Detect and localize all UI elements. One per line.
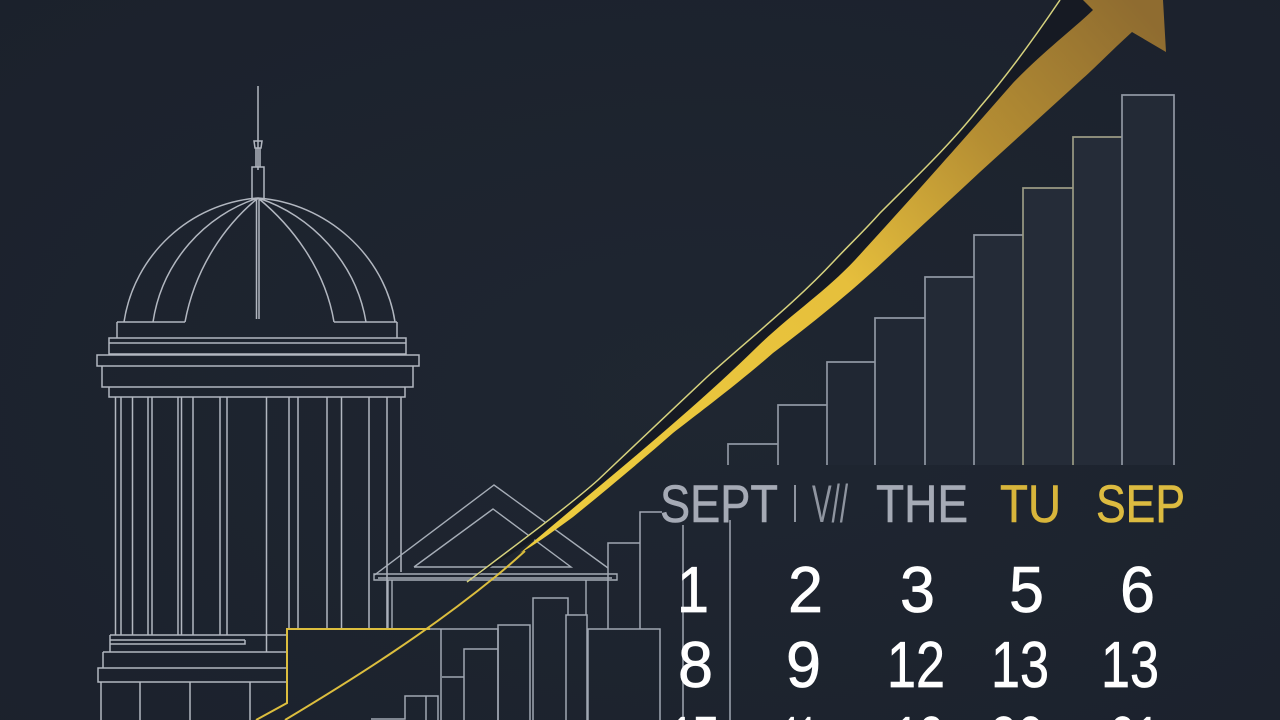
arrow: thin line upper — [467, 0, 1060, 582]
icon: domed capitol building — [97, 86, 419, 720]
bar 5 outline — [925, 277, 974, 465]
calendar header row — [660, 475, 1185, 534]
header: SEP: SEP — [1096, 475, 1185, 534]
bar 3 outline — [827, 362, 875, 465]
header: I — [794, 485, 796, 522]
row 1: 5 — [1009, 553, 1044, 626]
bar 4 outline — [875, 318, 925, 465]
shadow band beside arrow — [467, 0, 1093, 582]
bar 6 — [974, 235, 1023, 465]
bar 1 — [728, 444, 778, 465]
header: TU: TU — [1000, 475, 1061, 534]
bar 4 — [875, 318, 925, 465]
bar 2 — [778, 405, 827, 465]
row 1: 6 — [1120, 553, 1155, 626]
bar 9 outline — [1122, 95, 1174, 465]
bar 7 outline — [1023, 188, 1073, 465]
bar 6 outline — [974, 235, 1023, 465]
row 2: 9 — [786, 628, 821, 701]
row 2: 8 — [678, 628, 713, 701]
row 1 — [677, 553, 1155, 626]
header: THE: THE — [876, 475, 968, 534]
row 2: 13 — [1101, 628, 1159, 701]
entablature — [374, 574, 617, 580]
arrow: thin gold outline tail — [256, 551, 525, 720]
row 1: 1 — [677, 553, 709, 626]
calendar numbers — [677, 553, 1159, 701]
small city bar chart — [371, 512, 730, 720]
pediment roofs — [374, 485, 608, 575]
bar 2 outline — [778, 405, 827, 465]
header: SEPT: SEPT — [660, 475, 778, 534]
bar 3 — [827, 362, 875, 465]
bar 5 — [925, 277, 974, 465]
row 2 — [678, 628, 1159, 701]
icon: small pediment building — [374, 485, 617, 629]
bar 8 — [1073, 137, 1122, 465]
row 2: 13 — [991, 628, 1049, 701]
building base steps — [98, 635, 287, 720]
bar 7 — [1023, 188, 1073, 465]
row 1: 2 — [788, 553, 823, 626]
colonnade — [116, 397, 401, 652]
arrow: gold growth arrow — [520, 0, 1166, 553]
dome ribs — [124, 198, 395, 322]
row 1: 3 — [900, 553, 935, 626]
bar 9 — [1122, 95, 1174, 465]
posts — [388, 580, 586, 629]
bar chart: rising bars — [728, 95, 1174, 465]
dome drum and cornice — [97, 322, 419, 397]
calendar numbers row 3, cut off by the frame — [670, 703, 1160, 720]
dome spire — [252, 86, 264, 199]
header: V: V// — [812, 475, 848, 534]
bar 8 outline — [1073, 137, 1122, 465]
row 2: 12 — [887, 628, 945, 701]
